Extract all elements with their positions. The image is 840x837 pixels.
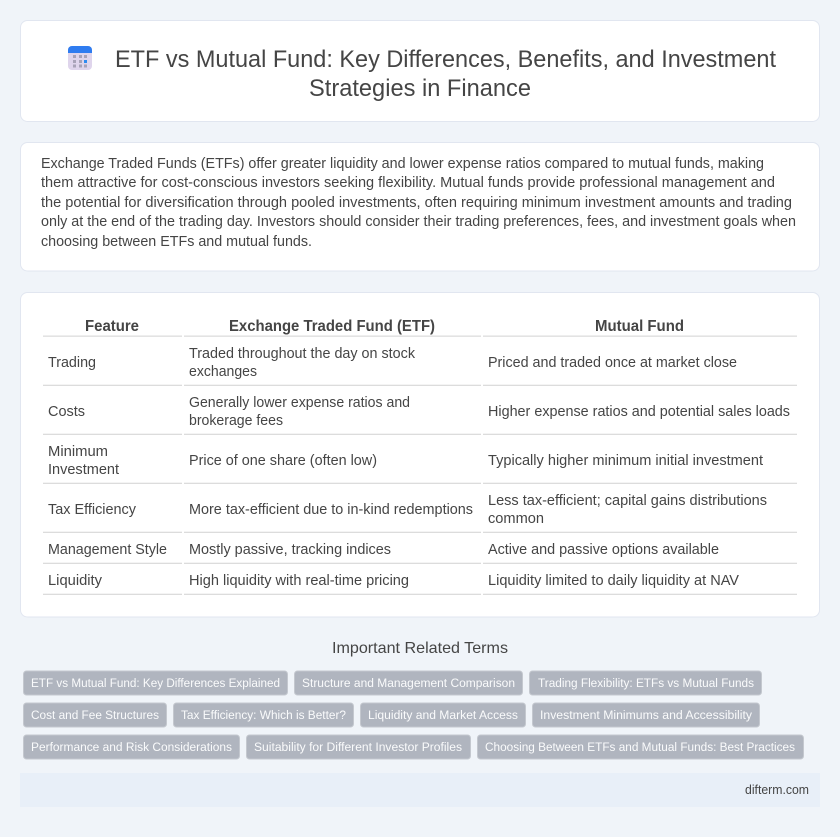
- row: trading: exchanges: [189, 364, 257, 380]
- row: liquidity: Liquidity: [48, 573, 103, 589]
- related term chips: Trading Flexibility: ETFs vs Mutual Funds: [538, 676, 754, 690]
- row: management style: Mostly passive, tracking indices: [189, 542, 391, 558]
- panel: summary text: Exchange Traded Funds (ETFs) offer greater liquidity and lower expense ratios compared to mutual funds, making: [41, 156, 764, 172]
- row: tax efficiency: [48, 493, 767, 527]
- row: management style: [48, 542, 719, 558]
- footer: [20, 773, 820, 807]
- table header: [85, 318, 684, 335]
- related term chips: Structure and Management Comparison: [302, 676, 515, 690]
- related term chips: Tax Efficiency: Which is Better?: [181, 708, 346, 722]
- panel: summary text: choosing between ETFs and mutual funds.: [41, 234, 312, 250]
- related term chips: [24, 671, 804, 759]
- panel: summary text: only at the end of the trading day. Investors should consider their trading preferences, fees, and investment goals when: [41, 214, 796, 230]
- footer: difterm.com: [745, 783, 809, 797]
- row: costs: [48, 395, 790, 429]
- row: minimum investment: Minimum: [48, 444, 108, 460]
- row: trading: [48, 346, 737, 380]
- row: costs: Costs: [48, 404, 85, 420]
- table header: Exchange Traded Fund (ETF): [229, 318, 435, 335]
- row: management style: Active and passive options available: [488, 542, 719, 558]
- related term chips: Investment Minimums and Accessibility: [540, 708, 753, 722]
- panel: summary text: [20, 142, 820, 271]
- table header: Feature: [85, 318, 139, 335]
- related term chips: Cost and Fee Structures: [31, 708, 159, 722]
- row: costs: brokerage fees: [189, 413, 283, 429]
- title: [115, 46, 776, 102]
- row: trading: Traded throughout the day on stock: [189, 346, 416, 362]
- row: liquidity: High liquidity with real-time pricing: [189, 573, 409, 589]
- related term chips: Liquidity and Market Access: [368, 708, 518, 722]
- row: costs: Higher expense ratios and potential sales loads: [488, 404, 790, 420]
- row: minimum investment: Investment: [48, 462, 119, 478]
- title: Strategies in Finance: [309, 75, 531, 102]
- row: tax efficiency: More tax-efficient due to in-kind redemptions: [189, 502, 473, 518]
- row: minimum investment: Price of one share (often low): [189, 453, 377, 469]
- panel: summary text: the potential for diversification through pooled investments, often requiring minimum investment amounts and trading: [41, 195, 792, 211]
- panel: title card: [20, 20, 820, 122]
- row: minimum investment: [48, 444, 763, 478]
- related term chips: ETF vs Mutual Fund: Key Differences Explained: [31, 676, 280, 690]
- related term chips: Choosing Between ETFs and Mutual Funds: Best Practices: [485, 740, 795, 754]
- icon: calendar: [68, 46, 92, 70]
- table header: Mutual Fund: [595, 318, 684, 335]
- row: liquidity: [48, 573, 739, 589]
- row: tax efficiency: Tax Efficiency: [48, 502, 137, 518]
- related term chips: Suitability for Different Investor Profiles: [254, 740, 462, 754]
- related term chips: Performance and Risk Considerations: [31, 740, 232, 754]
- title: ETF vs Mutual Fund: Key Differences, Benefits, and Investment: [115, 46, 776, 73]
- row: trading: Trading: [48, 355, 96, 371]
- panel: comparison table: [20, 292, 820, 617]
- row: management style: Management Style: [48, 542, 167, 558]
- heading: important related terms: Important Related Terms: [332, 640, 508, 657]
- row: trading: Priced and traded once at market close: [488, 355, 737, 371]
- row: tax efficiency: Less tax-efficient; capital gains distributions: [488, 493, 767, 509]
- row: tax efficiency: common: [488, 511, 544, 527]
- panel: summary text: them attractive for cost-conscious investors seeking flexibility. Mutual funds provide professional management and: [41, 175, 775, 191]
- row: minimum investment: Typically higher minimum initial investment: [488, 453, 763, 469]
- row: liquidity: Liquidity limited to daily liquidity at NAV: [488, 573, 739, 589]
- row: costs: Generally lower expense ratios and: [189, 395, 410, 411]
